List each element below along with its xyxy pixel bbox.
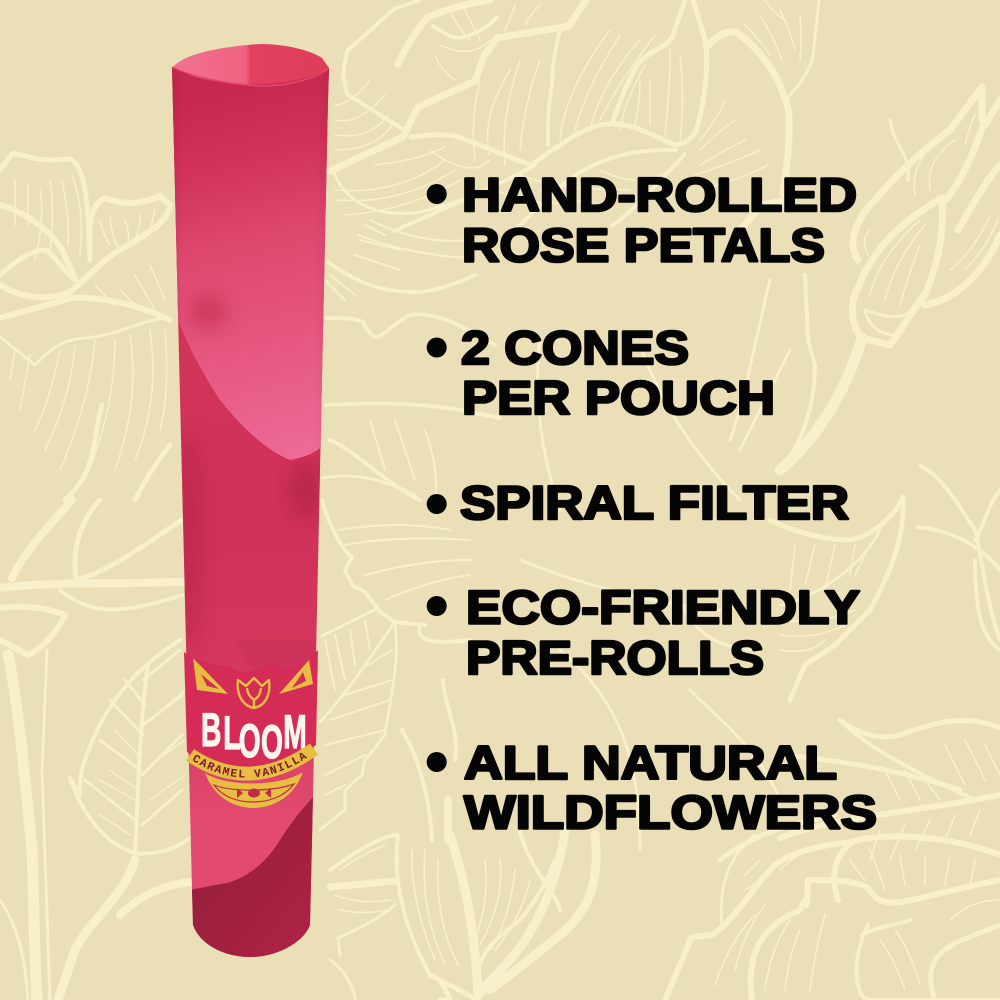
band shape — [184, 650, 318, 772]
feature: 2 cones per pouch: PER POUCH — [462, 371, 775, 424]
feature: all natural wildflowers: ALL NATURAL — [464, 736, 837, 789]
left flower — [0, 153, 170, 365]
top rose outline — [330, 0, 819, 231]
bottom bud — [330, 830, 596, 1000]
mid shadow — [181, 442, 204, 638]
feature: eco-friendly pre-rolls: PRE-ROLLS — [466, 631, 764, 684]
feature: eco-friendly pre-rolls: ECO-FRIENDLY — [466, 580, 860, 634]
area between cone and text — [320, 170, 500, 830]
gold wing: right — [279, 660, 313, 694]
feature: eco-friendly pre-rolls — [427, 580, 860, 684]
lower petal shading — [316, 640, 317, 652]
cone body — [172, 67, 329, 957]
feature: spiral filter: SPIRAL FILTER — [460, 476, 849, 529]
lip highlight — [172, 67, 329, 86]
feature: all natural wildflowers: WILDFLOWERS — [464, 786, 877, 838]
feature: all natural wildflowers — [427, 736, 877, 838]
dark base petal — [192, 797, 313, 957]
feature: hand-rolled rose petals: HAND-ROLLED — [462, 168, 857, 221]
large pink petal — [170, 60, 332, 460]
gold wing: left — [193, 658, 228, 694]
mid bud behind text — [402, 275, 815, 850]
right lower leaf — [770, 465, 1000, 700]
feature list — [427, 168, 877, 838]
feature: hand-rolled rose petals: ROSE PETALS — [462, 218, 825, 272]
lower-left stem and leaf — [0, 500, 190, 1000]
feature: hand-rolled rose petals — [427, 168, 857, 272]
product band label — [184, 650, 318, 808]
right bud — [780, 87, 1000, 470]
feature: 2 cones per pouch: 2 CONES — [461, 321, 689, 374]
gold ribbon — [190, 749, 314, 774]
flavor text: CARAMEL VANILLA — [193, 752, 308, 778]
icon: tulip logo — [238, 678, 269, 708]
top rose hatching — [335, 0, 801, 215]
crescent ornaments — [237, 788, 271, 798]
feature: 2 cones per pouch — [427, 321, 775, 424]
gold crescent — [205, 772, 303, 808]
crescent inner — [214, 784, 294, 802]
brand name: BLOOM — [201, 705, 307, 769]
bottom right leaves — [720, 720, 1000, 860]
bottom right rose — [665, 835, 1000, 1000]
rose petal cone — [172, 44, 330, 957]
left flower hatching — [10, 175, 167, 480]
cone inner opening — [172, 44, 329, 85]
